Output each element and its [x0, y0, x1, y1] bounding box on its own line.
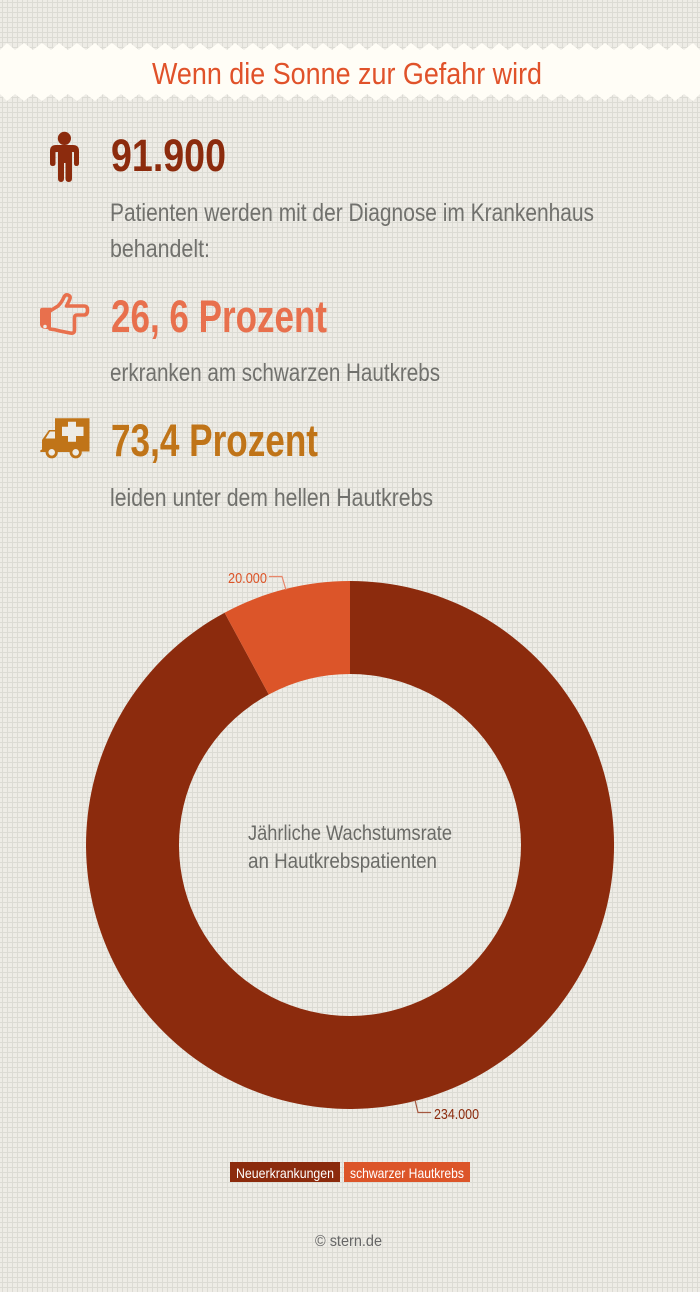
title banner: [0, 43, 700, 101]
center label: [248, 822, 452, 873]
stat: 91.900: 91.900: [111, 130, 226, 181]
text: light skin cancer: leiden unter dem hellen Hautkrebs: [110, 484, 433, 512]
legend item: schwarzer Hautkrebs: schwarzer Hautkrebs: [350, 1165, 464, 1181]
label: 20.000: [228, 570, 286, 590]
stat: 26,6 percent: 26, 6 Prozent: [111, 291, 327, 342]
title: Wenn die Sonne zur Gefahr wird: [152, 56, 542, 91]
text: patients: [110, 199, 594, 263]
legend item: Neuerkrankungen: Neuerkrankungen: [236, 1165, 334, 1181]
donut chart: [86, 570, 614, 1123]
slice: Neuerkrankungen: [86, 581, 614, 1109]
label: 234.000: [415, 1100, 479, 1123]
legend: [230, 1162, 470, 1182]
icon: person: [50, 132, 79, 182]
copyright: © stern.de: [315, 1233, 382, 1250]
text: patients: Patienten werden mit der Diagnose im Krankenhaus: [110, 199, 594, 227]
slice: schwarzer Hautkrebs: [225, 581, 350, 694]
label: 20.000: 20.000: [228, 570, 267, 587]
center label: Jährliche Wachstumsrate: [248, 822, 452, 845]
center label: an Hautkrebspatienten: [248, 850, 437, 873]
label: 234.000: 234.000: [434, 1106, 479, 1123]
text: black skin cancer: erkranken am schwarzen Hautkrebs: [110, 359, 440, 387]
icon: ambulance: [40, 418, 90, 457]
text: patients: behandelt:: [110, 235, 210, 263]
icon: pointing hand: [40, 295, 88, 333]
stat: 73,4 percent: 73,4 Prozent: [111, 415, 318, 466]
